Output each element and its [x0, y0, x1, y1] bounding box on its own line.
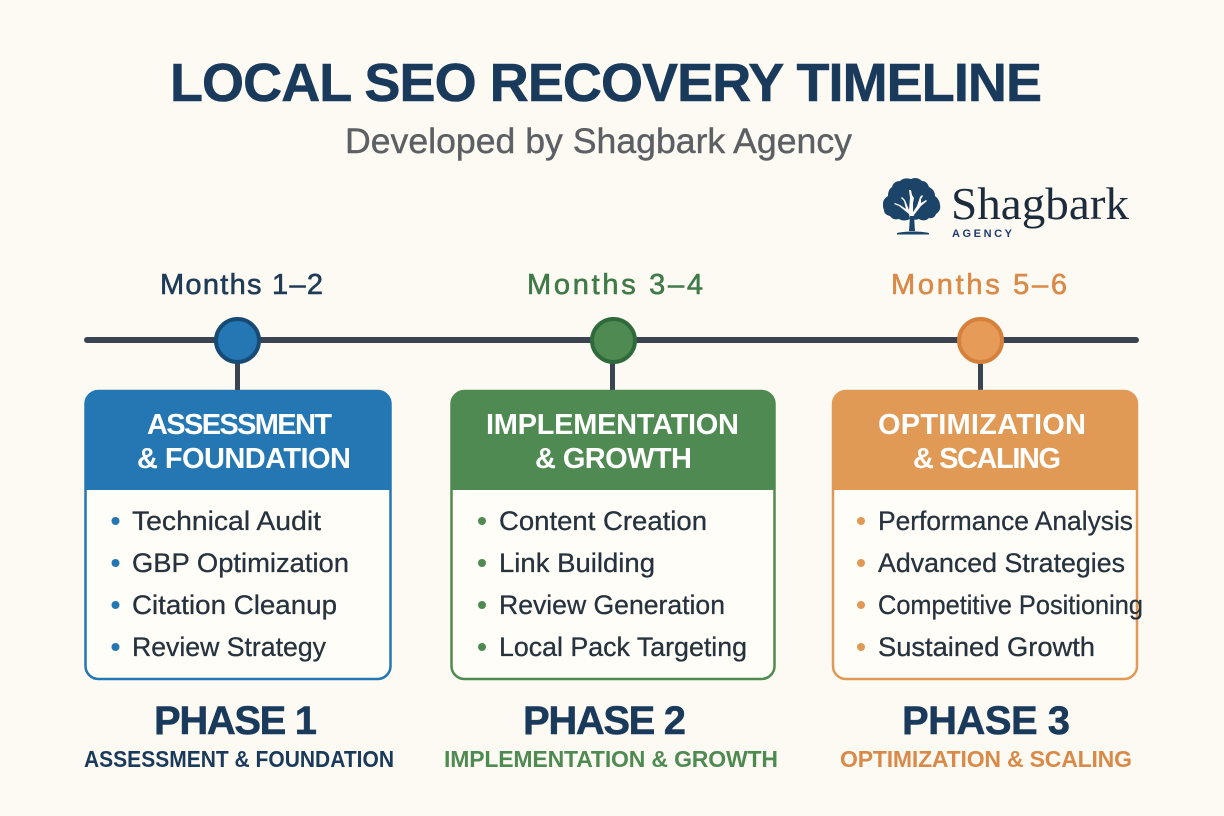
phase 2 list: Local Pack Targeting	[499, 632, 747, 662]
phase 3 list: Advanced Strategies	[878, 548, 1125, 578]
phase 2 sublabel: IMPLEMENTATION & GROWTH	[444, 746, 778, 772]
phase 2 list: Review Generation	[499, 590, 725, 620]
phase 1 list: Citation Cleanup	[132, 590, 337, 620]
phase 3 header	[832, 390, 1138, 490]
phase 1 sublabel: ASSESSMENT & FOUNDATION	[84, 746, 394, 772]
phase 3 sublabel: OPTIMIZATION & SCALING	[840, 746, 1132, 772]
phase 2 list	[499, 506, 747, 662]
logo wordmark: Shagbark	[951, 178, 1129, 229]
phase 3 list: Competitive Positioning	[878, 590, 1143, 620]
subtitle: Developed by Shagbark Agency	[345, 122, 853, 161]
phase 2 header text: IMPLEMENTATION	[486, 409, 739, 441]
phase 3 list: Sustained Growth	[878, 632, 1095, 662]
phase 2 header text: & GROWTH	[535, 443, 692, 475]
phase 3 list	[878, 506, 1143, 662]
panel: phase 2 card	[451, 390, 775, 679]
phase 1 label: PHASE 1	[154, 699, 317, 743]
phase 1 list: Technical Audit	[132, 506, 322, 536]
phase 3 label: PHASE 3	[902, 699, 1070, 743]
phase 2 list: Content Creation	[499, 506, 707, 536]
logo: Shagbark Agency	[883, 178, 1129, 240]
month label 2: Months 3–4	[527, 269, 703, 301]
panel: phase 1 card	[85, 390, 391, 679]
phase 1 list	[132, 506, 349, 662]
phase 1 bullets	[112, 517, 120, 651]
phase 3 header text: OPTIMIZATION	[878, 409, 1086, 441]
timeline node 1	[216, 319, 259, 362]
month label 3: Months 5–6	[891, 269, 1067, 301]
phase 1 header	[85, 390, 391, 490]
panel: phase 3 card	[832, 390, 1143, 679]
connector 3	[978, 360, 983, 392]
timeline axis	[87, 337, 1136, 343]
phase 2 label: PHASE 2	[523, 699, 686, 743]
phase 1 list: Review Strategy	[132, 632, 326, 662]
phase 2 list: Link Building	[499, 548, 655, 578]
timeline node 3	[959, 319, 1002, 362]
phase 1 header text: ASSESSMENT	[147, 409, 332, 441]
phase 3 bullets	[857, 517, 865, 651]
icon: tree	[883, 178, 940, 234]
phase 1 list: GBP Optimization	[132, 548, 349, 578]
connector 1	[235, 360, 240, 392]
month label 1: Months 1–2	[160, 269, 323, 301]
phase 3 list: Performance Analysis	[878, 506, 1133, 536]
timeline node 2	[592, 319, 635, 362]
title: LOCAL SEO RECOVERY TIMELINE	[170, 53, 1042, 113]
phase 3 header text: & SCALING	[913, 443, 1061, 475]
phase 2 bullets	[478, 517, 486, 651]
phase 1 header text: & FOUNDATION	[137, 443, 351, 475]
connector 2	[610, 360, 615, 392]
phase 2 header	[451, 390, 775, 490]
logo tagline: AGENCY	[952, 228, 1013, 240]
